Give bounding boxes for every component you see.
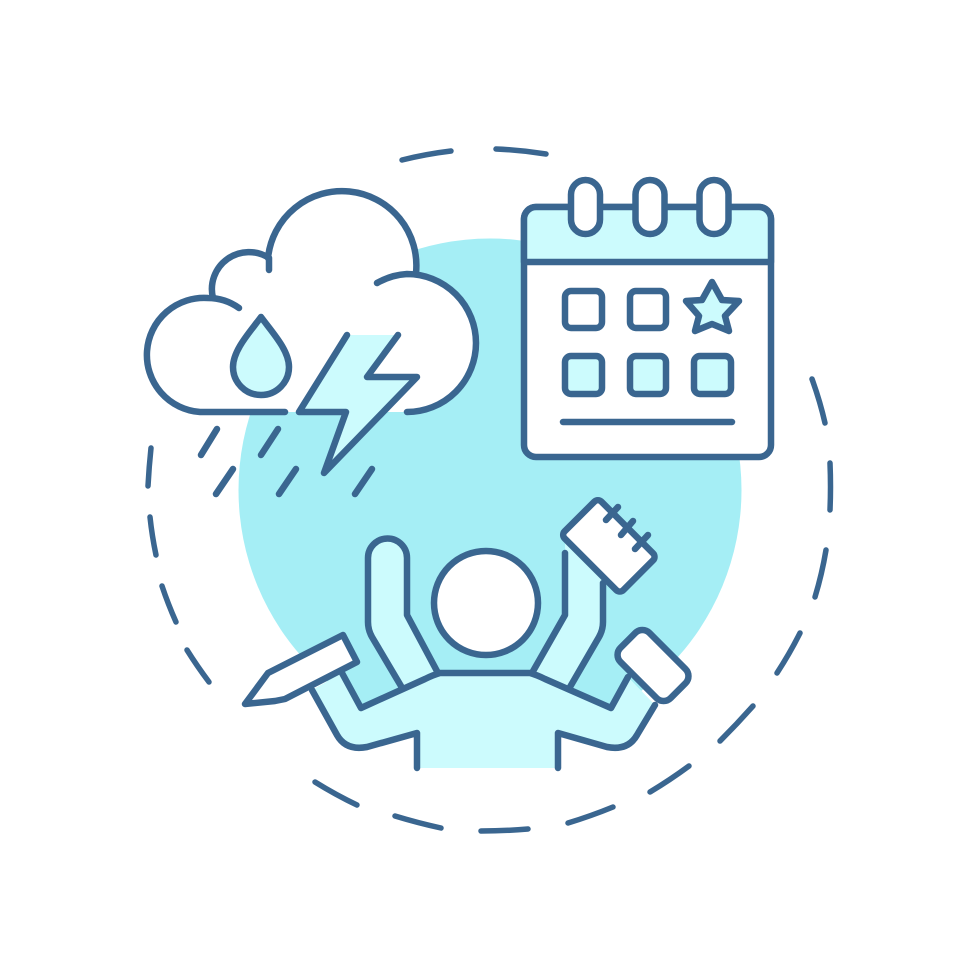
icon: phone	[613, 626, 693, 705]
background circle	[238, 238, 742, 742]
arm and body outlines	[312, 538, 655, 768]
calendar text line	[563, 419, 732, 425]
calendar header	[524, 207, 771, 262]
date squares row one	[565, 291, 666, 328]
dashed ring	[148, 149, 830, 831]
icon: pencil	[245, 635, 357, 704]
icon: calendar	[524, 180, 771, 457]
icon: star	[686, 282, 739, 331]
right raised arm	[532, 540, 603, 688]
figure: multitasking person	[245, 498, 693, 768]
icon: water drop	[233, 317, 289, 395]
left raised arm	[368, 538, 438, 688]
body and lower arms	[312, 673, 655, 768]
icon: storm cloud	[147, 191, 476, 494]
icon: notebook	[561, 498, 657, 594]
head	[434, 551, 538, 655]
icon: lightning bolt	[299, 335, 417, 473]
date squares row two	[565, 356, 731, 394]
binder rings	[571, 180, 728, 234]
rain drops	[201, 429, 372, 494]
cloud outline	[147, 191, 476, 412]
cloud fill	[149, 191, 476, 412]
calendar page	[524, 207, 771, 457]
